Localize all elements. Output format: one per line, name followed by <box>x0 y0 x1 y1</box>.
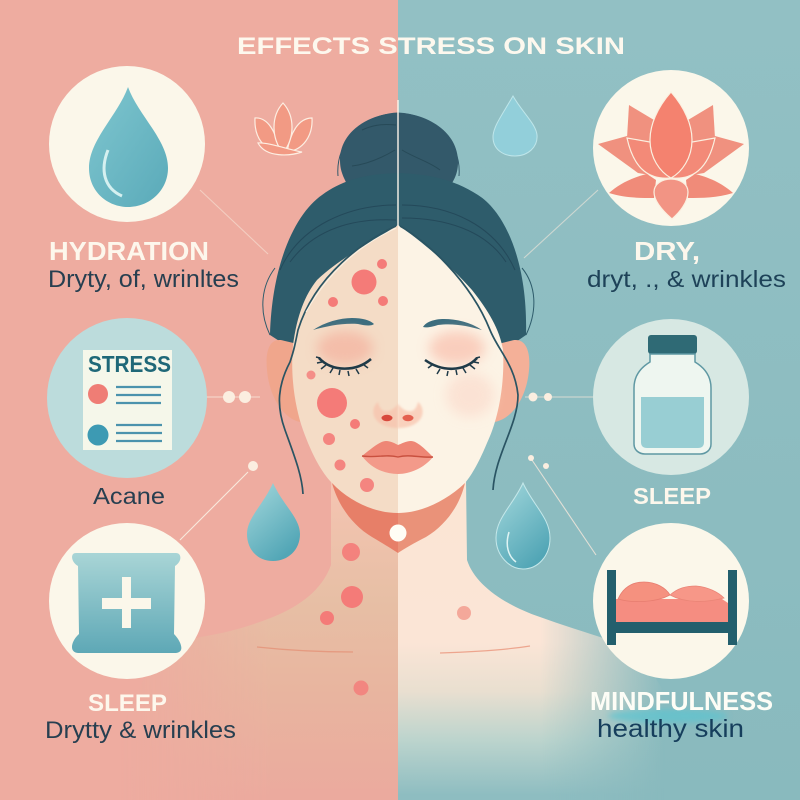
heading: mindfulness: MINDFULNESS <box>590 688 773 716</box>
panel: stress circle <box>47 318 207 478</box>
center divider <box>397 100 399 226</box>
closed eyes <box>316 357 480 376</box>
panel: lotus circle <box>593 70 749 226</box>
hair <box>263 173 534 382</box>
figure: neck and shoulders <box>204 482 654 792</box>
title: EFFECTS STRESS ON SKIN <box>237 33 625 60</box>
text: dry wrinkles right: dryt, ., & wrinkles <box>587 266 786 292</box>
connector dots <box>223 391 552 471</box>
icon: drop lower left <box>247 483 300 561</box>
ears <box>267 340 529 422</box>
eyebrows <box>313 318 482 330</box>
icon: small lotus left <box>255 103 312 155</box>
face: left half <box>292 225 398 513</box>
panel: bottle circle <box>593 319 749 475</box>
text: drytty wrinkles: Drytty & wrinkles <box>45 717 236 744</box>
icon: water drop <box>89 87 168 207</box>
icon: bed <box>607 570 737 645</box>
center dot <box>390 524 406 542</box>
heading: sleep right: SLEEP <box>633 483 711 509</box>
heading: hydration: HYDRATION <box>49 238 209 266</box>
icon: bottle <box>634 335 711 454</box>
background: left panel <box>0 0 398 800</box>
icon: drop lower right <box>496 483 550 569</box>
hair strands <box>279 226 518 494</box>
background: right panel <box>398 0 800 800</box>
text: healthy skin: healthy skin <box>597 715 744 743</box>
icon: stress document <box>83 350 172 450</box>
heading: sleep left: SLEEP <box>88 690 167 717</box>
decorative glow under mindfulness <box>608 709 728 723</box>
icon: stress document: STRESS <box>88 351 171 377</box>
acne spots <box>306 259 471 696</box>
icon: lotus <box>598 92 744 219</box>
hair bun <box>338 113 459 200</box>
cheek blush <box>317 331 494 417</box>
text: acne: Acane <box>93 483 165 509</box>
icon: pillow with plus <box>72 553 181 653</box>
lips <box>362 441 433 474</box>
panel: pillow circle <box>49 523 205 679</box>
face: right half <box>398 225 503 513</box>
text: dry wrinkles left: Dryty, of, wrinltes <box>48 266 239 293</box>
heading: dry: DRY, <box>634 238 700 266</box>
panel: hydration circle <box>49 66 205 222</box>
icon: small drop top right <box>493 96 537 156</box>
panel: bed circle <box>593 523 749 679</box>
nose <box>373 402 423 428</box>
connector lines <box>180 190 598 555</box>
